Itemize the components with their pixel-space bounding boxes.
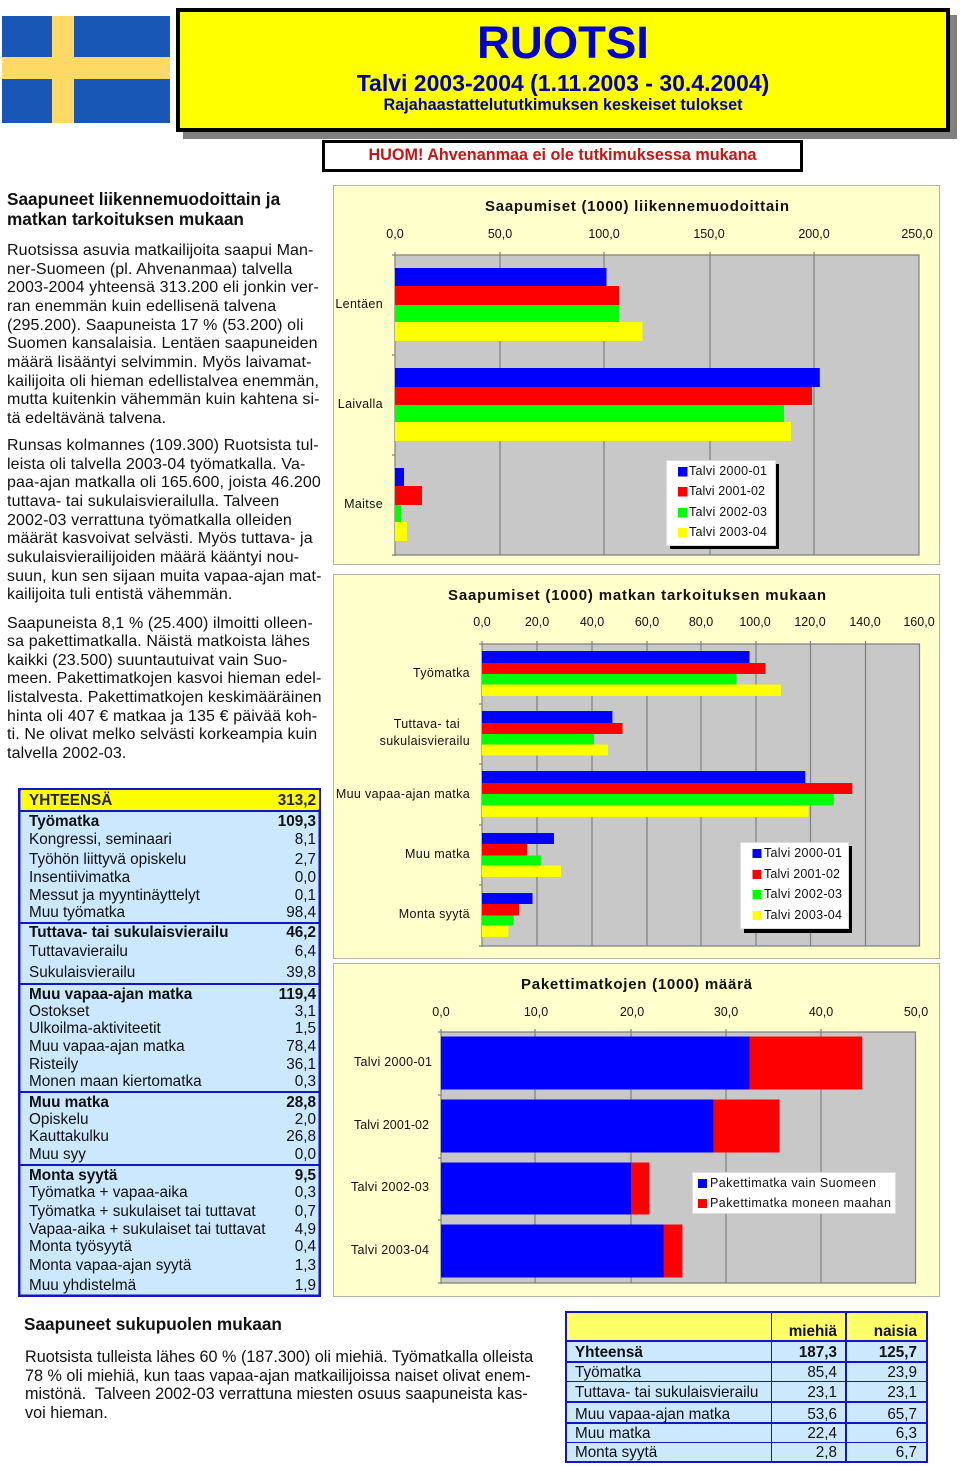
section: visits: Tuttava- tai sukulaisvierailu	[29, 924, 228, 941]
text block: purpose of trip	[7, 437, 322, 603]
category labels: Talvi 2000-01	[354, 1055, 432, 1069]
text block: purpose of trip: sukulaisvierailijoiden määrä kääntyi nou-	[7, 549, 299, 566]
table header	[567, 1313, 926, 1340]
text block: by gender: Ruotsista tulleista lähes 60 % (187.300) oli miehiä. Työmatkalla olleista	[25, 1348, 533, 1366]
section: several reasons: 1,3	[295, 1257, 316, 1274]
text block: arrivals: Suomen kansalaisia. Lentäen saapuneiden	[7, 335, 318, 352]
notice box: HUOM! Ahvenanmaa ei ole tutkimuksessa mukana	[368, 146, 757, 164]
category labels: Lentäen	[335, 297, 383, 311]
axis labels: 0,0	[386, 227, 404, 241]
section: several reasons: Vapaa-aika + sukulaiset tai tuttavat	[29, 1221, 266, 1238]
row: visits: 23,1	[807, 1384, 837, 1400]
section: other trips: 0,0	[295, 1146, 316, 1163]
plot area	[479, 641, 920, 947]
legend: Talvi 2000-01	[764, 846, 842, 860]
legend: Talvi 2000-01	[689, 464, 767, 478]
bars: Talvi 2002-03	[441, 1162, 649, 1214]
axis labels: 10,0	[524, 1005, 548, 1019]
category labels	[335, 297, 383, 511]
section: several reasons: Monta vapaa-ajan syytä	[29, 1257, 191, 1274]
category labels	[336, 666, 470, 921]
section: other trips: Muu syy	[29, 1146, 86, 1163]
row: work: 85,4	[807, 1364, 837, 1380]
text block: purpose of trip: leista oli talvella 2003-04 työmatkalla. Va-	[7, 456, 305, 473]
axis labels: 150,0	[693, 227, 725, 241]
row: work: Työmatka	[575, 1364, 641, 1380]
notice box	[322, 140, 803, 172]
text block: purpose of trip: tuttava- tai sukulaisvierailulla. Talveen	[7, 493, 279, 510]
text block: purpose of trip: Runsas kolmannes (109.300) Ruotsista tul-	[7, 437, 319, 454]
category labels: Tuttava- tai	[394, 717, 460, 731]
section: several reasons: 4,9	[295, 1221, 316, 1238]
legend: Talvi 2003-04	[689, 525, 767, 539]
axis labels: 30,0	[714, 1005, 738, 1019]
row: other: 22,4	[807, 1425, 837, 1442]
heading: arrivals by mode and purpose: Saapuneet liikennemuodoittain ja	[7, 189, 280, 209]
bars: Laivalla	[395, 368, 820, 441]
section: other leisure: Muu vapaa-ajan matka	[29, 986, 192, 1003]
section: several reasons: 1,9	[295, 1277, 316, 1294]
category labels: Talvi 2003-04	[351, 1243, 429, 1257]
section: several reasons: 0,3	[295, 1184, 316, 1201]
row: leisure: 53,6	[807, 1406, 837, 1422]
row: total: Yhteensä	[575, 1344, 643, 1361]
panel: chart arrivals by purpose	[333, 574, 940, 959]
legend	[666, 460, 779, 549]
legend: Talvi 2001-02	[764, 867, 840, 881]
text block: purpose of trip: määrät kasvoivat selvästi. Myös tuttava- ja	[7, 530, 313, 547]
text block: arrivals: Ruotsissa asuvia matkailijoita saapui Man-	[7, 242, 314, 259]
axis labels: 40,0	[580, 615, 604, 629]
section: several reasons: Muu yhdistelmä	[29, 1277, 136, 1294]
row: several reasons: 6,7	[896, 1444, 917, 1460]
axis labels: 20,0	[525, 615, 549, 629]
section: other leisure: 78,4	[286, 1038, 316, 1055]
text block: package trips: meen. Pakettimatkojen kasvoi hieman edel-	[7, 670, 321, 687]
row: several reasons: 2,8	[816, 1444, 837, 1460]
section: visits: 39,8	[286, 964, 316, 981]
axis labels: 80,0	[689, 615, 713, 629]
bars: Muu vapaa-ajan matka	[482, 771, 852, 817]
section: other trips: 2,0	[295, 1111, 316, 1128]
row: visits: Tuttava- tai sukulaisvierailu	[575, 1384, 758, 1400]
chart title: Pakettimatkojen (1000) määrä	[521, 976, 753, 993]
section: work trips	[29, 813, 316, 921]
axis labels: 100,0	[739, 615, 771, 629]
bars: Lentäen	[395, 268, 642, 341]
section: several reasons: Monta syytä	[29, 1167, 117, 1184]
total row: YHTEENSÄ	[29, 792, 112, 809]
bars: Työmatka	[482, 651, 781, 696]
section: work trips: Kongressi, seminaari	[29, 831, 172, 848]
text block: by gender: mistönä. Talveen 2002-03 verrattuna miesten osuus saapuneista kas-	[25, 1385, 528, 1403]
section: work trips: Työhön liittyvä opiskelu	[29, 851, 186, 868]
section: work trips: 0,1	[295, 887, 316, 904]
axis labels: 50,0	[488, 227, 512, 241]
row: several reasons: Monta syytä	[575, 1444, 657, 1460]
axis labels: 20,0	[620, 1005, 644, 1019]
text block: purpose of trip: kailijoita tuli entistä vähemmän.	[7, 586, 232, 603]
heading: arrivals by mode and purpose: matkan tarkoituksen mukaan	[7, 208, 244, 228]
section: other trips	[29, 1094, 316, 1163]
category labels: Talvi 2001-02	[354, 1118, 429, 1132]
section: other leisure: Risteily	[29, 1056, 78, 1073]
section: other trips: Muu matka	[29, 1094, 109, 1111]
category labels: sukulaisvierailu	[380, 734, 470, 748]
legend: Pakettimatka moneen maahan	[710, 1196, 891, 1210]
section: visits: 46,2	[286, 924, 316, 941]
row: visits: 23,1	[887, 1384, 917, 1400]
section: several reasons: 0,4	[295, 1238, 316, 1255]
section: other leisure: Monen maan kiertomatka	[29, 1073, 202, 1090]
axis labels	[473, 615, 935, 629]
section: work trips: Työmatka	[29, 813, 99, 830]
text block: by gender: voi hieman.	[25, 1404, 108, 1422]
row: other	[575, 1425, 917, 1442]
category labels: Talvi 2002-03	[351, 1180, 429, 1194]
section: work trips: 2,7	[295, 851, 316, 868]
row: other: Muu matka	[575, 1425, 650, 1442]
row: total: 187,3	[799, 1344, 837, 1361]
section: work trips: 98,4	[286, 904, 316, 921]
text block: purpose of trip: paa-ajan matkalla oli 165.600, joista 46.200	[7, 474, 321, 491]
column labels: naisia	[874, 1323, 917, 1340]
section: visits: Sukulaisvierailu	[29, 964, 135, 981]
text block: purpose of trip: suun, kun sen sijaan muita vapaa-ajan mat-	[7, 568, 322, 585]
legend	[692, 1172, 896, 1214]
text block: arrivals: mutta kuitenkin vähemmän kuin kahtena si-	[7, 391, 320, 408]
section: work trips: 109,3	[278, 813, 316, 830]
section: other trips: 26,8	[286, 1128, 316, 1145]
axis labels	[432, 1005, 928, 1019]
section: other leisure: 3,1	[295, 1003, 316, 1020]
title: RUOTSI	[477, 17, 649, 68]
text block: arrivals: 2003-2004 yhteensä 313.200 eli jonkin ver-	[7, 279, 319, 296]
section: other leisure: Muu vapaa-ajan matka	[29, 1038, 185, 1055]
total row: 313,2	[278, 792, 316, 809]
row: several reasons	[575, 1444, 917, 1460]
text block: package trips: kaikki (23.500) suuntautuivat vain Suo-	[7, 652, 287, 669]
section: work trips: Muu työmatka	[29, 904, 125, 921]
chart title: Saapumiset (1000) matkan tarkoituksen mukaan	[448, 587, 826, 604]
section: work trips: 0,0	[295, 869, 316, 886]
section: several reasons: 9,5	[295, 1167, 316, 1184]
axis labels	[386, 227, 933, 241]
text block: arrivals: tä edeltävänä talvena.	[7, 410, 166, 427]
text block: arrivals: ran enemmän kuin edellisenä talvena	[7, 298, 276, 315]
column labels	[789, 1323, 918, 1340]
legend: Talvi 2003-04	[764, 908, 842, 922]
text block: arrivals: kailijoita oli hieman edellistalvea enemmän,	[7, 373, 319, 390]
category labels: Muu vapaa-ajan matka	[336, 787, 470, 801]
panel: chart package trips	[333, 963, 940, 1297]
legend: Talvi 2002-03	[689, 505, 767, 519]
text block: package trips: talvella 2002-03.	[7, 745, 126, 762]
bars: Maitse	[395, 468, 422, 541]
axis labels: 120,0	[794, 615, 826, 629]
category labels: Laivalla	[338, 397, 383, 411]
text block: by gender	[25, 1348, 534, 1422]
section: visits: 6,4	[295, 943, 316, 960]
section: several reasons: Työmatka + sukulaiset tai tuttavat	[29, 1203, 256, 1220]
text block: package trips: hinta oli 407 € matkaa ja 135 € päivää koh-	[7, 708, 317, 725]
axis labels: 60,0	[635, 615, 659, 629]
category labels: Maitse	[344, 497, 383, 511]
bars: Talvi 2000-01	[441, 1036, 862, 1090]
panel: chart arrivals by mode of transport	[333, 185, 940, 565]
section: other trips: Opiskelu	[29, 1111, 89, 1128]
section: other leisure: Ostokset	[29, 1003, 89, 1020]
bars: Muu matka	[482, 833, 561, 877]
axis labels: 200,0	[798, 227, 830, 241]
row: total: 125,7	[879, 1344, 917, 1361]
legend	[740, 842, 852, 933]
section: other leisure: 36,1	[286, 1056, 316, 1073]
category labels: Monta syytä	[399, 907, 470, 921]
section: other trips: 28,8	[286, 1094, 316, 1111]
section: visits	[29, 924, 316, 981]
row: work	[575, 1364, 917, 1380]
heading: arrivals by mode and purpose	[7, 189, 280, 228]
subtitle: period: Talvi 2003-2004 (1.11.2003 - 30.4.2004)	[357, 70, 769, 96]
category labels: Muu matka	[405, 847, 470, 861]
row: leisure: Muu vapaa-ajan matka	[575, 1406, 730, 1422]
row: total	[575, 1344, 917, 1361]
row: visits	[575, 1384, 917, 1400]
category labels	[351, 1055, 432, 1257]
axis labels: 50,0	[904, 1005, 928, 1019]
legend: Talvi 2002-03	[764, 887, 842, 901]
section: several reasons: Monta työsyytä	[29, 1238, 132, 1255]
legend: Pakettimatka vain Suomeen	[710, 1176, 876, 1190]
bars: Monta syytä	[482, 893, 532, 937]
bars: Talvi 2003-04	[441, 1224, 682, 1278]
chart title: Saapumiset (1000) liikennemuodoittain	[485, 198, 789, 215]
axis labels: 40,0	[809, 1005, 833, 1019]
panel: gender table	[565, 1311, 928, 1463]
subtitle: survey: Rajahaastattelututkimuksen keskeiset tulokset	[384, 96, 742, 114]
text block: arrivals	[7, 242, 320, 427]
text block: package trips	[7, 614, 322, 762]
section: work trips: 8,1	[295, 831, 316, 848]
bars: Talvi 2001-02	[441, 1100, 780, 1152]
text block: package trips: Saapuneista 8,1 % (25.400) ilmoitti olleen-	[7, 614, 313, 632]
axis labels: 100,0	[588, 227, 620, 241]
axis labels: 250,0	[901, 227, 933, 241]
section: other leisure	[29, 986, 316, 1090]
bars: Tuttava- tai sukulaisvierailu	[482, 711, 622, 756]
panel: purpose breakdown table	[18, 788, 321, 1297]
text block: arrivals: (295.200). Saapuneista 17 % (53.200) oli	[7, 317, 304, 334]
row: work: 23,9	[887, 1364, 917, 1380]
text block: package trips: sa pakettimatkalla. Näistä matkoista lähes	[7, 633, 310, 650]
text block: package trips: listalvesta. Pakettimatkojen keskimääräinen	[7, 689, 322, 706]
row: other: 6,3	[896, 1425, 917, 1442]
text block: by gender: 78 % oli miehiä, kun taas vapaa-ajan matkailijoissa naiset olivat enem-	[25, 1367, 531, 1385]
section: other trips: Kauttakulku	[29, 1128, 109, 1145]
section: other leisure: 119,4	[279, 986, 316, 1003]
legend: Talvi 2001-02	[689, 484, 765, 498]
section: other leisure: 0,3	[295, 1073, 316, 1090]
plot area	[392, 252, 919, 556]
text block: purpose of trip: 2002-03 verrattuna työmatkalla olleiden	[7, 512, 292, 529]
row: leisure	[575, 1406, 917, 1422]
section: work trips: Insentiivimatka	[29, 869, 130, 886]
section: other leisure: 1,5	[295, 1020, 316, 1037]
text block: package trips: ti. Ne olivat melko selvästi korkeampia kuin	[7, 726, 317, 743]
category labels: Työmatka	[413, 666, 470, 680]
axis labels: 160,0	[903, 615, 935, 629]
text block: arrivals: ner-Suomeen (pl. Ahvenanmaa) talvella	[7, 261, 292, 278]
title banner	[176, 8, 950, 132]
row: leisure: 65,7	[887, 1406, 917, 1422]
plot area	[438, 1029, 916, 1284]
section: several reasons	[29, 1167, 316, 1294]
icon: Swedish flag	[2, 16, 170, 123]
text block: arrivals: määrä lisääntyi selvimmin. Myös laivamat-	[7, 354, 312, 371]
axis labels: 140,0	[849, 615, 881, 629]
section: work trips: Messut ja myyntinäyttelyt	[29, 887, 200, 904]
column labels: miehiä	[789, 1323, 837, 1340]
heading: by gender: Saapuneet sukupuolen mukaan	[24, 1314, 282, 1334]
section: visits: Tuttavavierailu	[29, 943, 128, 960]
total row	[20, 790, 318, 809]
section: several reasons: Työmatka + vapaa-aika	[29, 1184, 188, 1201]
axis labels: 0,0	[473, 615, 491, 629]
section: other leisure: Ulkoilma-aktiviteetit	[29, 1020, 161, 1037]
section: several reasons: 0,7	[295, 1203, 316, 1220]
axis labels: 0,0	[432, 1005, 450, 1019]
